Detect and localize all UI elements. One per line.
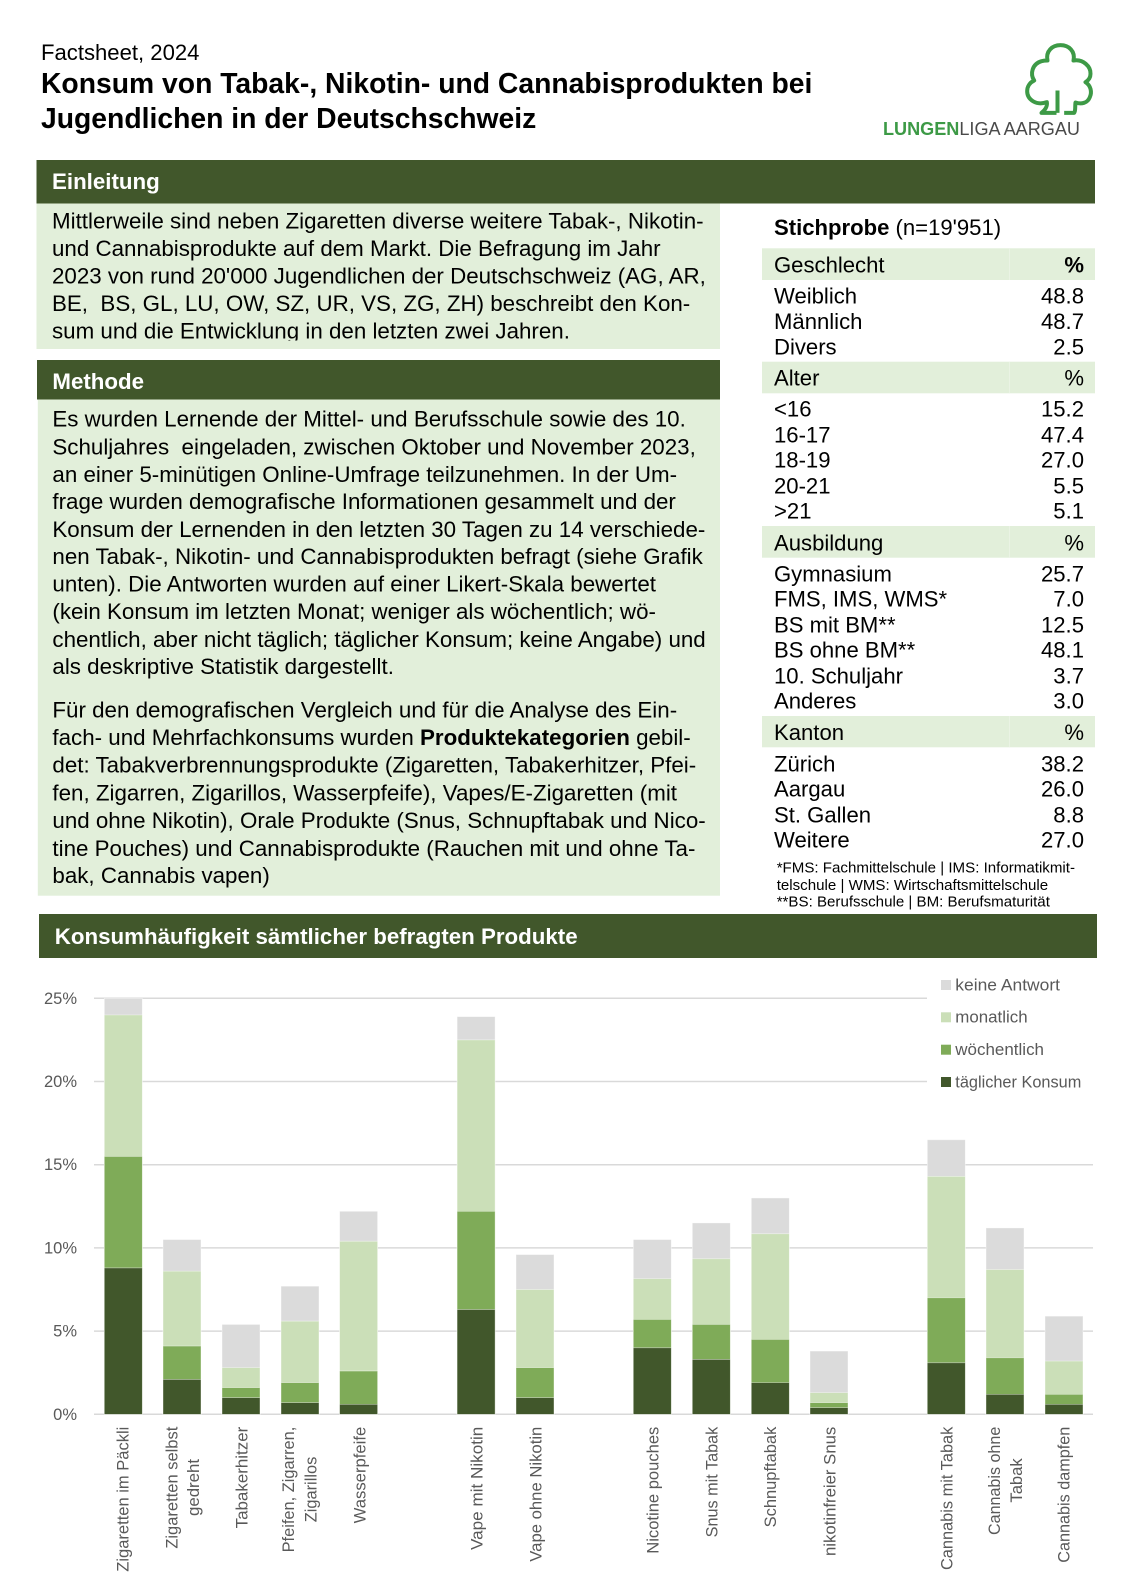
- table group: Geschlecht: [762, 248, 1095, 359]
- table group: Kanton: 27.0: [1041, 828, 1084, 853]
- legend: keine Antwort: [955, 977, 1060, 995]
- y axis labels: 25%: [44, 990, 77, 1008]
- panel: Einleitung text: Mittlerweile sind neben Zigaretten diverse weitere Tabak-, Nikotin-: [52, 208, 704, 233]
- icon: tree: [1027, 45, 1091, 113]
- x axis labels: Schnupftabak: [762, 1426, 780, 1527]
- y axis labels: 15%: [44, 1156, 77, 1174]
- table group: Kanton: 26.0: [1041, 777, 1084, 802]
- y axis gridlines: [94, 998, 1093, 1414]
- x axis labels: Zigaretten selbst: [163, 1426, 181, 1549]
- x axis labels: Snus mit Tabak: [704, 1426, 722, 1537]
- table group: Ausbildung: 12.5: [1041, 612, 1084, 637]
- table group: Alter: 18-19: [774, 448, 831, 473]
- table group: Geschlecht: 48.7: [1041, 309, 1084, 334]
- table group: Kanton: 38.2: [1041, 752, 1084, 777]
- table footnote: telschule | WMS: Wirtschaftsmittelschule: [777, 877, 1048, 894]
- table group: Ausbildung: 10. Schuljahr: [774, 663, 903, 688]
- panel: Methode text: (kein Konsum im letzten Monat; weniger als wöchentlich; wö-: [52, 599, 656, 624]
- x axis labels: Nicotine pouches: [645, 1427, 663, 1554]
- table group: Kanton: Zürich: [774, 752, 835, 777]
- x axis labels: gedreht: [185, 1459, 203, 1516]
- table group: Alter: %: [1064, 366, 1084, 391]
- table group: Alter: 47.4: [1041, 423, 1084, 448]
- section header: Konsumhäufigkeit: Konsumhäufigkeit sämtlicher befragten Produkte: [55, 924, 578, 949]
- panel: Methode text: nen Tabak-, Nikotin- und Cannabisprodukten befragt (siehe Grafik: [52, 544, 704, 569]
- table group: Geschlecht: Männlich: [774, 309, 862, 334]
- panel: Methode text: [38, 400, 720, 896]
- bars: [104, 998, 1083, 1414]
- title: [41, 67, 812, 134]
- legend: wöchentlich: [954, 1041, 1044, 1059]
- table group: Ausbildung: [762, 526, 1095, 713]
- table group: Alter: <16: [774, 397, 811, 422]
- table group: Ausbildung: 7.0: [1053, 587, 1084, 612]
- panel: Methode text: chentlich, aber nicht täglich; täglicher Konsum; keine Angabe) und: [52, 627, 706, 652]
- panel: Stichprobe table: [762, 215, 1095, 911]
- title: Jugendlichen in der Deutschschweiz: [41, 102, 536, 134]
- panel: Methode text: Es wurden Lernende der Mittel- und Berufsschule sowie des 10.: [52, 407, 686, 432]
- table group: Ausbildung: Ausbildung: [774, 530, 883, 556]
- panel: Methode text: unten). Die Antworten wurden auf einer Likert-Skala bewertet: [52, 572, 657, 597]
- table group: Geschlecht: Geschlecht: [774, 253, 885, 278]
- y axis labels: 5%: [53, 1323, 77, 1341]
- table footnote: **BS: Berufsschule | BM: Berufsmaturität: [777, 894, 1051, 911]
- table heading: Stichprobe (n=19'951): [774, 215, 1001, 240]
- x axis labels: Vape mit Nikotin: [469, 1427, 487, 1550]
- table group: Alter: >21: [774, 498, 811, 523]
- table group: Ausbildung: Anderes: [774, 688, 856, 713]
- section header: Methode: Methode: [52, 369, 144, 394]
- legend: [941, 977, 1081, 1092]
- table group: Ausbildung: 48.1: [1041, 638, 1084, 663]
- x axis labels: Zigaretten im Päckli: [114, 1427, 132, 1572]
- panel: Methode text: Schuljahres eingeladen, zwischen Oktober und November 2023,: [52, 434, 696, 459]
- table group: Alter: 5.5: [1053, 473, 1084, 498]
- panel: Einleitung text: [36, 204, 720, 349]
- table group: Alter: 27.0: [1041, 448, 1084, 473]
- table group: Ausbildung: BS ohne BM**: [774, 638, 916, 663]
- panel: Methode text: fach- und Mehrfachkonsums wurden Produktekategorien gebil-: [52, 725, 691, 750]
- table group: Ausbildung: 3.7: [1053, 663, 1084, 688]
- section header: Einleitung: Einleitung: [52, 169, 160, 194]
- title: Konsum von Tabak-, Nikotin- und Cannabisprodukten bei: [41, 67, 812, 99]
- table group: Alter: 15.2: [1041, 397, 1084, 422]
- table group: Kanton: Aargau: [774, 777, 845, 802]
- panel: Methode text: fen, Zigarren, Zigarillos, Wasserpfeife), Vapes/E-Zigaretten (mit: [52, 781, 678, 806]
- panel: Methode text: und ohne Nikotin), Orale Produkte (Snus, Schnupftabak und Nico-: [52, 808, 706, 833]
- panel: Methode text: bak, Cannabis vapen): [52, 863, 270, 888]
- legend: täglicher Konsum: [955, 1074, 1081, 1092]
- table group: Ausbildung: Gymnasium: [774, 562, 892, 587]
- panel: Methode text: tine Pouches) und Cannabisprodukte (Rauchen mit und ohne Ta-: [52, 836, 695, 861]
- x axis labels: Zigarillos: [303, 1457, 321, 1522]
- table group: Alter: 20-21: [774, 473, 831, 498]
- section header: Methode: [37, 360, 720, 400]
- panel: Methode text: frage wurden demografische Informationen gesammelt und der: [52, 489, 676, 514]
- table group: Geschlecht: %: [1064, 253, 1084, 278]
- table group: Ausbildung: FMS, IMS, WMS*: [774, 587, 947, 612]
- section header: Konsumhäufigkeit: [39, 914, 1097, 958]
- x axis labels: nikotinfreier Snus: [821, 1427, 839, 1556]
- table group: Ausbildung: 25.7: [1041, 562, 1084, 587]
- table group: Ausbildung: 3.0: [1053, 688, 1084, 713]
- table group: Alter: Alter: [774, 366, 819, 391]
- panel: Einleitung text: und Cannabisprodukte auf dem Markt. Die Befragung im Jahr: [52, 236, 661, 261]
- y axis labels: 0%: [53, 1406, 77, 1424]
- panel: Methode text: det: Tabakverbrennungsprodukte (Zigaretten, Tabakerhitzer, Pfei-: [52, 752, 696, 778]
- x axis labels: Cannabis mit Tabak: [939, 1426, 957, 1570]
- legend: monatlich: [955, 1009, 1028, 1027]
- x axis labels: Pfeifen, Zigarren,: [280, 1427, 298, 1552]
- x axis labels: Tabak: [1008, 1458, 1026, 1503]
- table group: Kanton: %: [1064, 720, 1084, 745]
- table group: Alter: [762, 362, 1095, 523]
- table footnote: *FMS: Fachmittelschule | IMS: Informatikmit-: [777, 860, 1075, 877]
- y axis labels: 10%: [44, 1239, 77, 1257]
- panel: Methode text: Konsum der Lernenden in den letzten 30 Tagen zu 14 verschiede-: [52, 517, 705, 542]
- table group: Geschlecht: 2.5: [1053, 334, 1084, 359]
- stacked bar chart: [44, 977, 1093, 1572]
- panel: Einleitung text: sum und die Entwicklung in den letzten zwei Jahren.: [52, 318, 570, 343]
- y axis labels: 20%: [44, 1073, 77, 1091]
- table group: Alter: 16-17: [774, 423, 831, 448]
- table group: Kanton: Kanton: [774, 720, 844, 745]
- panel: Einleitung text: BE, BS, GL, LU, OW, SZ, UR, VS, ZG, ZH) beschreibt den Kon-: [52, 291, 690, 316]
- table group: Geschlecht: Divers: [774, 334, 837, 359]
- table group: Geschlecht: 48.8: [1041, 283, 1084, 308]
- header label: Factsheet, 2024: Factsheet, 2024: [41, 40, 199, 65]
- table group: Alter: 5.1: [1053, 498, 1084, 523]
- table group: Kanton: St. Gallen: [774, 803, 871, 828]
- section header: Einleitung: [36, 160, 1095, 204]
- table group: Ausbildung: %: [1064, 530, 1084, 556]
- table group: Kanton: Weitere: [774, 828, 850, 853]
- panel: Methode text: Für den demografischen Vergleich und für die Analyse des Ein-: [52, 697, 677, 722]
- y axis labels: [44, 990, 77, 1424]
- x axis labels: Tabakerhitzer: [233, 1426, 251, 1528]
- table footnote: [777, 860, 1075, 911]
- x axis labels: Cannabis ohne: [986, 1427, 1004, 1535]
- x axis labels: Wasserpfeife: [352, 1427, 370, 1523]
- table group: Ausbildung: BS mit BM**: [774, 612, 896, 637]
- x axis labels: [114, 1426, 1074, 1572]
- table group: Geschlecht: Weiblich: [774, 283, 857, 308]
- logo: Lungenliga Aargau: [883, 45, 1091, 139]
- table group: Kanton: [762, 716, 1095, 853]
- x axis labels: Cannabis dampfen: [1056, 1427, 1074, 1563]
- x axis labels: Vape ohne Nikotin: [528, 1427, 546, 1562]
- panel: Methode text: an einer 5-minütigen Online-Umfrage teilzunehmen. In der Um-: [52, 462, 677, 487]
- logo wordmark: LUNGENLIGA AARGAU: [883, 119, 1080, 139]
- panel: Einleitung text: 2023 von rund 20'000 Jugendlichen der Deutschschweiz (AG, AR,: [52, 263, 706, 288]
- table group: Kanton: 8.8: [1053, 803, 1084, 828]
- panel: Methode text: als deskriptive Statistik dargestellt.: [52, 654, 394, 679]
